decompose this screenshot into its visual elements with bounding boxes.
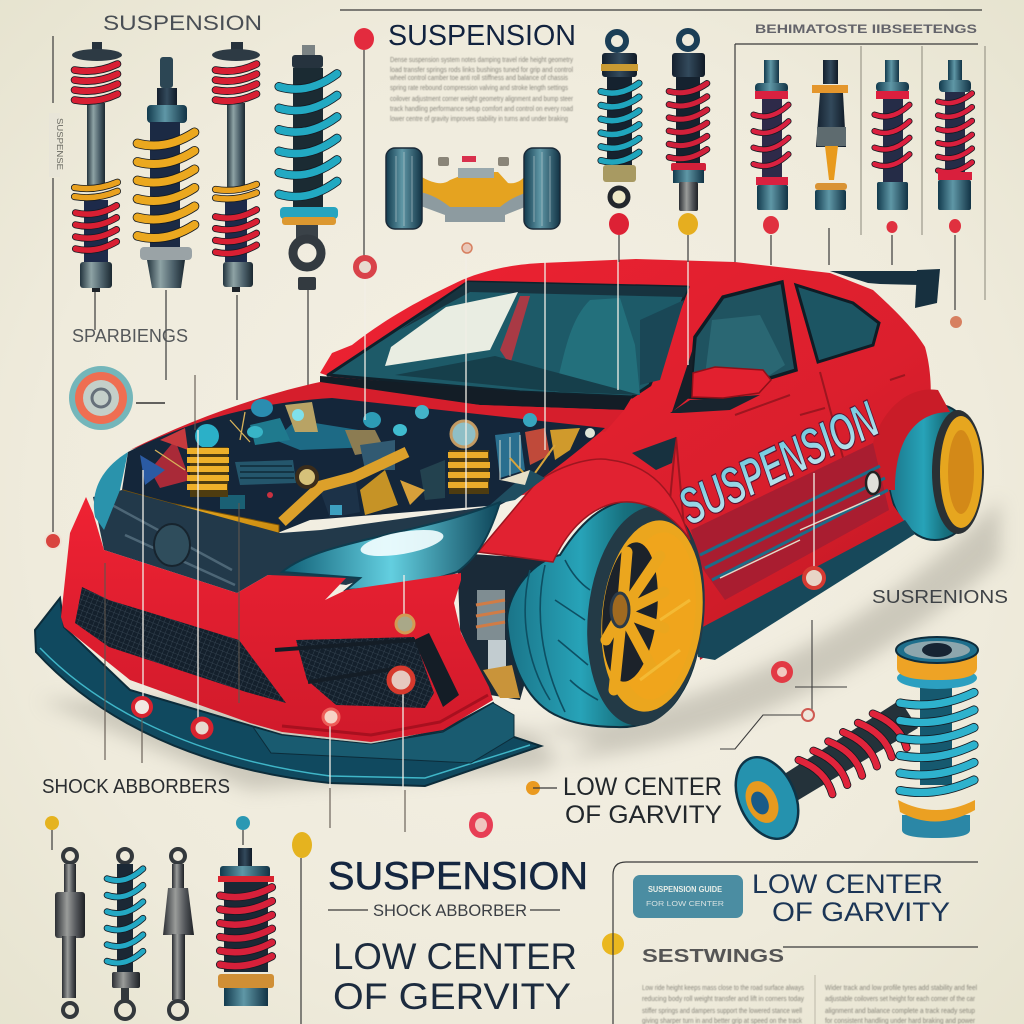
engine bay [122, 398, 605, 537]
marker [526, 781, 540, 795]
bumper accent [282, 695, 488, 735]
gold crossbar [122, 490, 279, 537]
rear spoiler [830, 269, 940, 308]
bay components [140, 399, 595, 518]
text block under heading [389, 57, 574, 123]
windshield [328, 282, 688, 397]
marker on crosshair [802, 709, 814, 721]
fender side vent [632, 437, 676, 470]
label: shock absorbers: SHOCK ABBORBERS [42, 776, 230, 798]
ground shadow [40, 500, 1000, 790]
rear flare [873, 389, 950, 490]
shock panel right 3 [874, 60, 910, 210]
door graphics [691, 443, 889, 600]
teal badge [633, 875, 743, 918]
cyan coil spring [900, 680, 974, 792]
text block under heading: load transfer springs rods links bushings tuned for grip and control [390, 67, 573, 74]
marker [45, 533, 61, 549]
faint leader lines [105, 375, 405, 832]
shock 2 top left gold [138, 57, 194, 288]
right bottom panel frame [613, 862, 978, 1024]
center title block [328, 855, 588, 1017]
text columns bottom right: stiffer springs and dampers support the lowered stance well [642, 1008, 802, 1015]
axle diagram [386, 148, 560, 229]
hood underside [130, 382, 624, 450]
bottom shock 3 [163, 849, 194, 1019]
side mirror [670, 367, 771, 413]
heading: low center right: LOW CENTER [752, 869, 943, 899]
front wheel [507, 500, 715, 731]
door cut lines and handles [670, 372, 905, 527]
heading: suspension: SUSPENSION [328, 855, 588, 898]
label: spring text: SPARBIENGS [72, 326, 188, 346]
front door window [690, 282, 796, 398]
marker [396, 615, 414, 633]
marker [356, 258, 374, 276]
shock cyan top middle [601, 32, 639, 206]
marker [193, 719, 211, 737]
subheading: settings: SESTWINGS [642, 946, 784, 966]
door seat [705, 315, 785, 375]
marker [886, 221, 898, 233]
front splitter [35, 598, 541, 786]
marker [472, 815, 490, 835]
cowl band [320, 376, 632, 410]
marker [763, 216, 779, 234]
teal badge: FOR LOW CENTER [646, 899, 725, 908]
text columns bottom right: alignment and balance complete a track ready setup [825, 1008, 975, 1015]
left margin tag: SUSPENSE [55, 118, 64, 170]
marker [354, 28, 374, 50]
shock panel right 4 [938, 60, 972, 210]
shock panel right 2 [812, 60, 848, 210]
blue turret right [451, 421, 477, 447]
top cap [896, 637, 978, 689]
bottom shock 2 cyan [107, 849, 143, 1019]
marker [462, 243, 472, 253]
front bumper [61, 497, 493, 742]
marker [804, 568, 824, 588]
car side body [320, 259, 931, 660]
bottom collar [898, 800, 975, 838]
left lamp edge [94, 452, 128, 530]
bottom shock 4 red [218, 848, 274, 1006]
text block under heading: track handling performance setup comfort and control on every road [390, 106, 573, 113]
heading: low center right [752, 869, 950, 927]
icon: target disc [69, 366, 165, 430]
front fender [478, 459, 690, 562]
shock 3 top left [212, 42, 260, 292]
bottom shock 1 [55, 849, 85, 1017]
heading: of gravity: OF GERVITY [333, 976, 571, 1017]
marker [774, 664, 790, 680]
shock 4 top left cyan [279, 45, 338, 290]
shock red top middle [669, 31, 707, 211]
rear door window [796, 285, 879, 362]
crosshair and connector lines [720, 620, 847, 749]
rod and red coil [775, 700, 918, 805]
text block under heading: coilover adjustment corner weight geometry alignment and bump steer [390, 96, 574, 103]
gold strut right [448, 450, 490, 494]
label: suspension right: SUSRENIONS [872, 587, 1008, 607]
marker [389, 668, 413, 692]
side skirt [697, 520, 915, 660]
marker [292, 832, 312, 858]
door lettering: SUSPENSION [670, 390, 888, 537]
emblem disc [154, 524, 190, 566]
marker [602, 933, 624, 955]
gold arm [282, 452, 407, 522]
headlight glow [359, 525, 445, 561]
heading: suspension main: SUSPENSION [388, 20, 576, 52]
windshield pale reflection [385, 292, 518, 366]
shock panel right 1 [754, 60, 788, 210]
heading: low center right: OF GARVITY [772, 897, 950, 927]
label: low center of gravity center: LOW CENTER [563, 773, 722, 801]
text columns bottom right: reducing body roll weight transfer and lift in corners today [642, 996, 804, 1003]
label: low center of gravity center: OF GARVITY [565, 801, 722, 829]
panel leader stems [533, 228, 955, 788]
cabin seat and frame [395, 296, 684, 395]
rear wheel [888, 404, 984, 540]
shock 1 top left [72, 42, 122, 292]
marker [949, 219, 961, 233]
wheel well suspension [457, 553, 560, 700]
heading: shock absorber: SHOCK ABBORBER [373, 901, 527, 920]
rear emblem [866, 472, 880, 494]
leader lines bottom left [52, 830, 301, 1024]
text columns bottom right: Low ride height keeps mass close to the road surface always [642, 985, 804, 992]
marker [133, 698, 151, 716]
lower side intake [296, 637, 434, 708]
marker [323, 709, 339, 725]
headlight [282, 502, 500, 590]
left margin tag [49, 113, 64, 177]
teal badge: SUSPENSION GUIDE [648, 885, 723, 894]
text block under heading: spring rate rebound compression valving and stroke length settings [390, 85, 568, 92]
windshield top band [400, 282, 688, 330]
marker [236, 816, 250, 830]
marker [950, 316, 962, 328]
text block under heading: lower centre of gravity improves stability in turns and under braking [390, 116, 568, 123]
panel inner rules [861, 46, 985, 300]
divider rules and leader lines [53, 10, 982, 532]
label: low center of gravity center [563, 773, 722, 829]
heading: suspension top left: SUSPENSION [103, 12, 262, 35]
gold strut left [187, 424, 229, 497]
large cut-away shock [723, 637, 978, 849]
marker [678, 213, 698, 235]
window pillar [672, 345, 694, 412]
splitter inner block [253, 703, 514, 763]
disc end [723, 747, 811, 849]
grille top [93, 490, 500, 593]
car illustration [35, 259, 984, 786]
text block under heading: wheel control camber toe anti roll stiffness and balance of chassis [389, 75, 568, 82]
marker [609, 213, 629, 235]
text columns bottom right: Wider track and low profile tyres add stability and feel [825, 985, 977, 992]
marker [45, 816, 59, 830]
text columns bottom right: adjustable coilovers set height for each corner of the car [825, 996, 976, 1003]
heading: low center: LOW CENTER [333, 936, 577, 977]
lower main grille [75, 587, 286, 703]
heading: top right small title: BEHIMATOSTE IIBSEETENGS [755, 24, 977, 36]
text block under heading: Dense suspension system notes damping travel ride height geometry [390, 57, 573, 64]
white leader lines over car [143, 235, 814, 790]
text columns bottom right [642, 985, 977, 1024]
